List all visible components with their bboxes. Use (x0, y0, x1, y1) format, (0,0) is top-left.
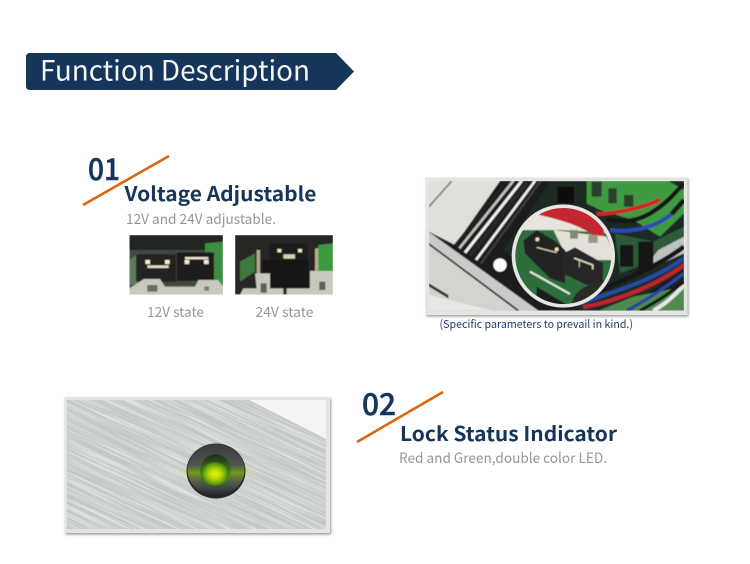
interior photo (429, 181, 684, 311)
magnified inset circle (510, 203, 617, 310)
aluminium front edge (429, 232, 538, 311)
photo: 24V jumper state (235, 235, 333, 295)
feature 01 title: Voltage Adjustable (123, 178, 316, 207)
photo frame (64, 397, 330, 533)
panel: framed LED indicator photo (64, 397, 330, 533)
white capacitor (493, 258, 507, 272)
wires (597, 199, 660, 214)
number 01: 01 (88, 145, 120, 189)
number 02: 02 (362, 380, 396, 424)
icon: LED indicator (186, 444, 246, 498)
caption: 12V state: 12V state (147, 302, 204, 322)
caption: 24V state: 24V state (256, 302, 314, 322)
feature 02 description: Red and Green,double color LED. (399, 448, 607, 468)
feature 01 description: 12V and 24V adjustable. (126, 209, 276, 229)
panel: framed product interior photo (426, 178, 688, 315)
photo: 12V jumper state (129, 235, 223, 295)
aluminium top plate (429, 181, 500, 245)
orange slash (83, 156, 169, 205)
section title banner: Function Description (40, 50, 310, 90)
feature 02 title: Lock Status Indicator (400, 418, 617, 447)
feature 01 heading (83, 145, 316, 229)
orange slash (357, 392, 443, 442)
feature 02 heading (357, 380, 617, 468)
LED glow spill (178, 468, 254, 478)
photo frame (426, 178, 688, 315)
caption: specific parameters note: (Specific parameters to prevail in kind.) (440, 316, 633, 332)
brushed metal photo (67, 400, 326, 529)
green circuit board (503, 181, 684, 311)
white corner background (249, 400, 326, 439)
